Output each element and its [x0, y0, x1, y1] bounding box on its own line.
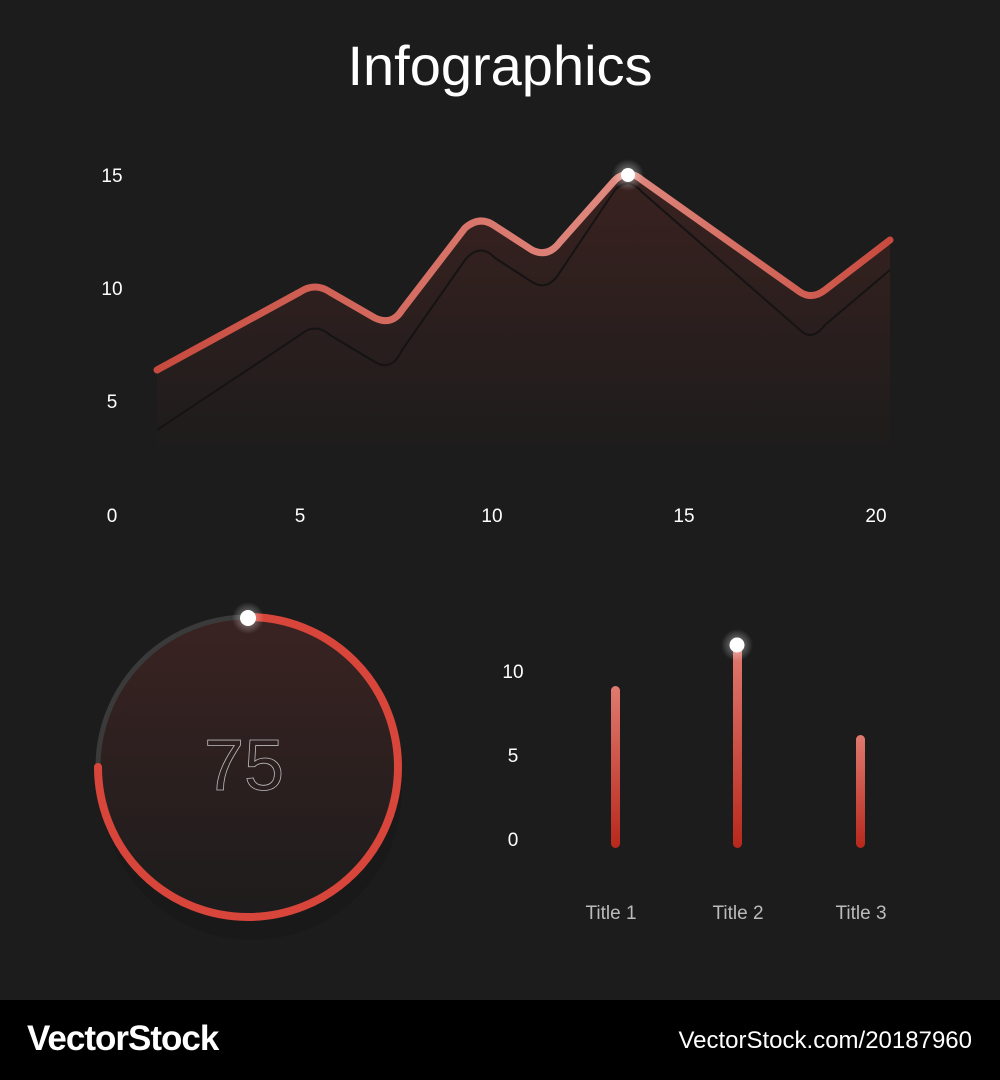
text: 15	[101, 166, 123, 187]
line chart axis labels	[101, 166, 887, 527]
text: 10	[502, 662, 524, 683]
bar labels	[502, 662, 887, 924]
text: 20	[865, 506, 887, 527]
gauge circle	[98, 602, 402, 940]
text: 10	[481, 506, 503, 527]
text: 15	[673, 506, 695, 527]
footer: VectorStock.com/20187960	[678, 1027, 972, 1054]
text: 0	[107, 506, 117, 527]
bars	[611, 629, 865, 848]
gauge circle: 75	[204, 726, 284, 806]
text: Title 1	[585, 903, 637, 924]
title: Infographics	[347, 34, 653, 97]
text: 5	[107, 392, 117, 413]
footer: VectorStock	[27, 1019, 218, 1058]
text: 0	[508, 830, 518, 851]
footer	[0, 1000, 1000, 1080]
text: 5	[295, 506, 305, 527]
text: Title 2	[712, 903, 764, 924]
text: Title 3	[835, 903, 887, 924]
text: 5	[508, 746, 518, 767]
text: 10	[101, 279, 123, 300]
